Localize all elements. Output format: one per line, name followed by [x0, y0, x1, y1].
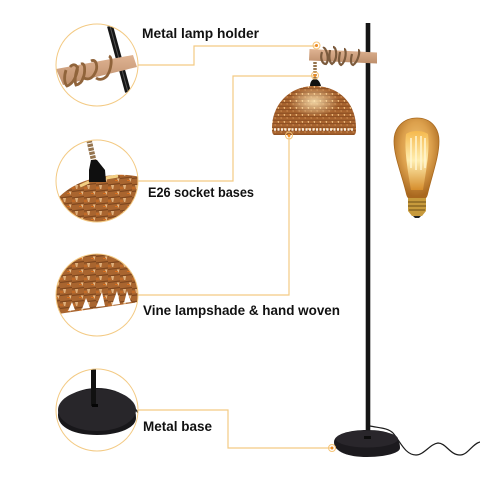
callout lines [138, 46, 332, 448]
lamp pole [366, 23, 370, 443]
socket [310, 79, 321, 86]
detail circle: metal base [56, 369, 139, 451]
bulb glass [394, 118, 439, 198]
wooden lamp holder with rope [309, 47, 377, 65]
heading: socket bases: E26 socket bases [148, 185, 254, 200]
bulb screw base [408, 198, 426, 216]
power cord [370, 426, 480, 455]
callout markers [286, 42, 336, 452]
bulb filament [411, 136, 425, 170]
heading: vine lampshade: Vine lampshade & hand woven [143, 303, 340, 318]
heading: metal base: Metal base [143, 419, 212, 434]
detail circle: woven lampshade [50, 254, 140, 336]
round metal base [334, 430, 400, 457]
woven lampshade [272, 86, 356, 135]
heading: metal lamp holder: Metal lamp holder [142, 26, 260, 41]
bulb inner glow [405, 131, 429, 190]
detail circle: socket base [56, 140, 140, 225]
hanging rope [313, 62, 317, 81]
Edison bulb [394, 118, 439, 218]
floor lamp [272, 23, 480, 457]
detail circle: metal lamp holder [56, 24, 138, 106]
